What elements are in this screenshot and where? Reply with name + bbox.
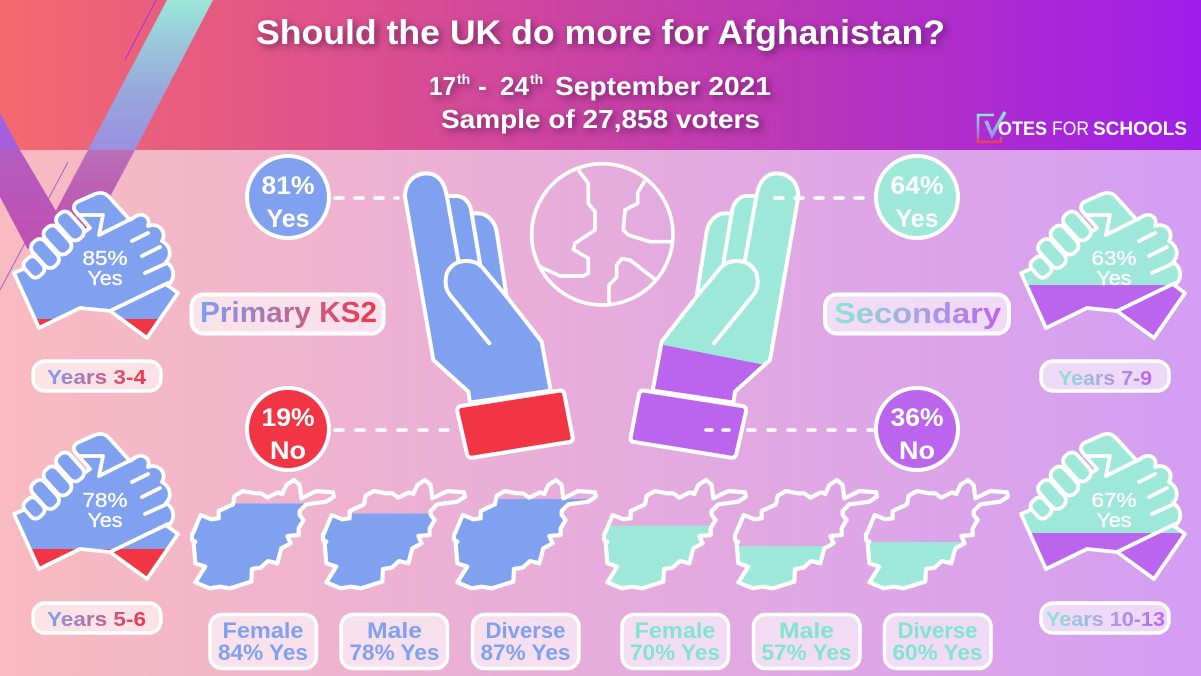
label: Years 7-9 [1041, 361, 1169, 391]
survey dates: th [530, 71, 543, 87]
label: primary female: 84% Yes [218, 640, 308, 665]
heading: Primary KS2: Primary KS2 [200, 297, 377, 329]
connector: primary yes [335, 196, 398, 200]
label: Years 5-6: Years 5-6 [47, 609, 146, 631]
logo: Votes for Schools [978, 112, 1187, 142]
map: secondary female 70% [604, 480, 746, 588]
circle: secondary 36% no: No [899, 437, 935, 465]
label: Years 10-13: Years 10-13 [1046, 609, 1165, 631]
map: primary male 78% [323, 480, 465, 588]
decorative diagonal bands [0, 0, 213, 290]
logo: Votes for Schools: FOR [1052, 119, 1089, 140]
circle: secondary 64% yes: 64% [890, 172, 944, 200]
connector: secondary yes [775, 196, 875, 200]
map: secondary diverse 60% [866, 480, 1008, 588]
label: secondary female: 70% Yes [630, 640, 720, 665]
cuff: primary no [457, 391, 573, 458]
handshake: Years 3-4: 85% [82, 248, 128, 270]
cuff: secondary no [631, 391, 746, 458]
map: primary female 84% [192, 480, 334, 588]
label: primary diverse: Diverse [486, 618, 566, 643]
label: secondary female [622, 614, 728, 668]
label: secondary diverse [884, 614, 991, 668]
circle: primary 19% no: No [270, 437, 306, 465]
survey dates [429, 71, 771, 101]
label: Years 10-13 [1041, 603, 1169, 633]
circle: secondary 64% yes: Yes [896, 205, 938, 233]
label: primary female: Female [222, 618, 304, 643]
label: primary diverse: 87% Yes [480, 640, 570, 665]
label: secondary male: Male [779, 618, 834, 643]
globe icon [532, 164, 673, 305]
handshake: Years 10-13: 67% [1092, 490, 1137, 512]
circle: secondary 36% no [876, 388, 958, 470]
big hand: primary [405, 173, 573, 458]
circle: primary 81% yes: Yes [266, 205, 310, 233]
handshake: Years 7-9: Yes [1096, 268, 1132, 290]
label: primary diverse [472, 614, 579, 668]
label: secondary diverse: 60% Yes [892, 640, 982, 665]
label: secondary diverse: Diverse [898, 618, 978, 643]
label: primary male: 78% Yes [350, 640, 440, 665]
label: Years 3-4: Years 3-4 [47, 367, 147, 389]
header banner [0, 0, 1201, 150]
handshake: Years 5-6: 78% [82, 490, 128, 512]
handshake: Years 7-9 [1021, 193, 1185, 338]
survey dates: September 2021 [555, 71, 771, 101]
map: primary diverse 87% [454, 480, 596, 588]
handshake: Years 3-4: Yes [88, 268, 122, 290]
label: Years 3-4 [33, 361, 161, 391]
label: secondary male [754, 614, 860, 668]
circle: primary 19% no [247, 388, 329, 470]
sample size: Sample of 27,858 voters [441, 104, 760, 134]
label: primary male [341, 614, 448, 668]
connector: primary no [335, 428, 462, 432]
circle: secondary 64% yes [876, 156, 958, 238]
survey dates: 17 [429, 71, 456, 101]
label: primary female [210, 614, 316, 668]
title: Should the UK do more for Afghanistan? [256, 14, 945, 52]
handshake: Years 5-6 [14, 434, 178, 579]
big hand: secondary [631, 173, 798, 458]
connector: secondary no (over cuff) [706, 428, 733, 432]
label: secondary female: Female [634, 618, 716, 643]
survey dates: th [457, 71, 470, 87]
circle: primary 81% yes: 81% [262, 172, 314, 200]
handshake: Years 10-13: Yes [1096, 510, 1132, 532]
connector: secondary no (behind) [748, 428, 875, 432]
circle: primary 81% yes [247, 156, 329, 238]
survey dates: - [478, 71, 487, 101]
logo: Votes for Schools: SCHOOLS [1093, 119, 1187, 140]
heading: Secondary [825, 294, 1009, 334]
handshake: Years 3-4 [14, 193, 178, 338]
circle: primary 19% no: 19% [262, 404, 314, 432]
handshake: Years 7-9: 63% [1092, 248, 1137, 270]
survey dates: 24 [500, 71, 530, 101]
logo: Votes for Schools: OTES [998, 119, 1047, 140]
heading: Secondary: Secondary [834, 298, 1001, 330]
label: primary male: Male [367, 618, 422, 643]
handshake: Years 5-6: Yes [88, 510, 122, 532]
label: secondary male: 57% Yes [762, 640, 852, 665]
label: Years 5-6 [33, 603, 161, 633]
handshake: Years 10-13 [1021, 434, 1185, 579]
label: Years 7-9: Years 7-9 [1058, 368, 1152, 390]
circle: secondary 36% no: 36% [890, 404, 944, 432]
map: secondary male 57% [735, 480, 877, 588]
